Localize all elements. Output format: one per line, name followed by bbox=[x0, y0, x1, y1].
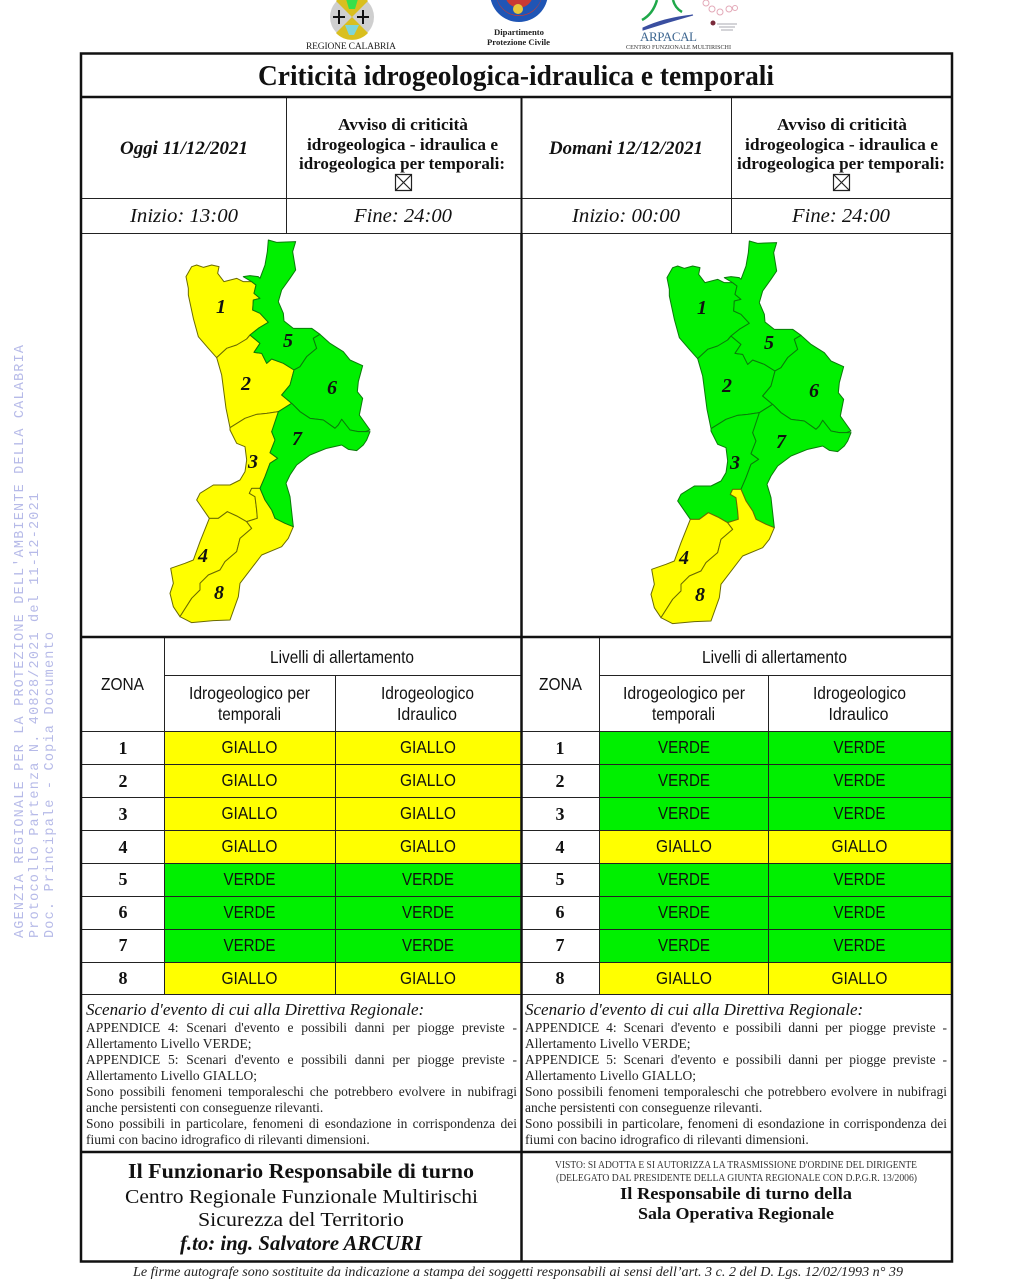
signature: duty officer bbox=[125, 1159, 478, 1255]
table: tomorrow alert levels: ZONA bbox=[539, 674, 582, 694]
table: today alert levels: VERDE bbox=[402, 935, 454, 955]
table: today alert levels: GIALLO bbox=[400, 770, 456, 790]
text block: scenario today: Allertamento Livello GIALLO; bbox=[86, 1068, 257, 1083]
table: today alert levels: VERDE bbox=[224, 902, 276, 922]
text block: scenario today: Sono possibili in particolare, fenomeni di esondazione in corrispondenza dei bbox=[86, 1116, 517, 1131]
sidebar: protocol stamp text: Protocollo Partenza N. 40828/2021 del 11-12-2021 bbox=[28, 493, 43, 938]
table: tomorrow alert levels: Livelli di allertamento bbox=[702, 647, 847, 667]
text block: scenario tomorrow: APPENDICE 5: Scenari d'evento e possibili danni per piogge previste - bbox=[525, 1052, 947, 1067]
table: tomorrow alert levels: GIALLO bbox=[656, 968, 712, 988]
sidebar: protocol stamp text bbox=[13, 344, 58, 938]
map labels: tomorrow: 1 bbox=[697, 297, 707, 319]
table: today alert levels: Idrogeologico per bbox=[189, 683, 310, 703]
table: today alert levels: 7 bbox=[118, 935, 128, 955]
map labels: today: 3 bbox=[247, 451, 258, 473]
text block: scenario tomorrow: APPENDICE 4: Scenari d'evento e possibili danni per piogge previste - bbox=[525, 1020, 947, 1035]
signature: duty officer: f.to: ing. Salvatore ARCURI bbox=[180, 1231, 423, 1255]
table: today alert levels: VERDE bbox=[224, 869, 276, 889]
text block: scenario tomorrow: fiumi con bacino idrografico di rilevanti dimensioni. bbox=[525, 1132, 809, 1147]
logo: ARPACAL: CENTRO FUNZIONALE MULTIRISCHI bbox=[626, 44, 731, 51]
map labels: tomorrow: 6 bbox=[809, 380, 819, 402]
text block: scenario tomorrow: Sono possibili in particolare, fenomeni di esondazione in corrispondenza dei bbox=[525, 1116, 947, 1131]
logo: Dipartimento Protezione Civile bbox=[487, 0, 550, 47]
table: today alert levels: GIALLO bbox=[222, 803, 278, 823]
text block: scenario today: fiumi con bacino idrografico di rilevanti dimensioni. bbox=[86, 1132, 370, 1147]
map labels: tomorrow: 2 bbox=[721, 375, 732, 397]
panel: tomorrow header: Fine: 24:00 bbox=[791, 205, 890, 227]
map labels: today: 1 bbox=[216, 296, 226, 318]
text block: scenario today: APPENDICE 5: Scenari d'evento e possibili danni per piogge previste - bbox=[86, 1052, 517, 1067]
table: today alert levels: 4 bbox=[118, 837, 128, 857]
table: tomorrow alert levels: 6 bbox=[556, 902, 564, 922]
title: Criticità idrogeologica-idraulica e temporali bbox=[258, 61, 774, 92]
table: tomorrow alert levels: 5 bbox=[556, 869, 564, 889]
map labels: today: 6 bbox=[327, 377, 337, 399]
table: tomorrow alert levels bbox=[539, 647, 951, 994]
table: tomorrow alert levels: GIALLO bbox=[656, 836, 712, 856]
map labels: today: 7 bbox=[292, 428, 303, 450]
map labels: tomorrow bbox=[678, 297, 819, 606]
logo: Regione Calabria bbox=[306, 0, 396, 52]
table: tomorrow alert levels: 4 bbox=[556, 837, 564, 857]
text block: scenario tomorrow: Sono possibili fenomeni temporaleschi che potrebbero evolvere in nubifragi bbox=[525, 1084, 947, 1099]
table: tomorrow alert levels: GIALLO bbox=[832, 836, 888, 856]
table: today alert levels: GIALLO bbox=[222, 968, 278, 988]
table: today alert levels bbox=[101, 647, 521, 994]
panel: today header: Oggi 11/12/2021 bbox=[120, 139, 248, 159]
table: tomorrow alert levels: VERDE bbox=[834, 935, 886, 955]
text block: scenario today: Sono possibili fenomeni temporaleschi che potrebbero evolvere in nubifragi bbox=[86, 1084, 517, 1099]
text block: scenario tomorrow: Allertamento Livello VERDE; bbox=[525, 1036, 690, 1051]
map labels: tomorrow: 8 bbox=[695, 584, 705, 606]
text block: scenario tomorrow: Scenario d'evento di cui alla Direttiva Regionale: bbox=[525, 1000, 863, 1019]
table: today alert levels: GIALLO bbox=[400, 836, 456, 856]
panel: today header: idrogeologica - idraulica e bbox=[307, 135, 498, 154]
table: today alert levels: 3 bbox=[118, 804, 128, 824]
text block: scenario today: Scenario d'evento di cui alla Direttiva Regionale: bbox=[86, 1000, 424, 1019]
signature: regional operations room: VISTO: SI ADOTTA E SI AUTORIZZA LA TRASMISSIONE D'ORDINE DEL DIRIGENTE bbox=[555, 1160, 917, 1171]
panel: tomorrow header: idrogeologica per temporali: bbox=[737, 154, 945, 173]
map labels: tomorrow: 3 bbox=[729, 452, 740, 474]
table: today alert levels: VERDE bbox=[402, 902, 454, 922]
text block: scenario today bbox=[86, 1000, 517, 1147]
table: tomorrow alert levels: VERDE bbox=[834, 869, 886, 889]
table: tomorrow alert levels: Idrogeologico per bbox=[623, 683, 745, 703]
signature: duty officer: Centro Regionale Funzionale Multirischi bbox=[125, 1186, 478, 1208]
table: tomorrow alert levels: 3 bbox=[556, 804, 564, 824]
panel: today header: Fine: 24:00 bbox=[353, 205, 452, 227]
table: today alert levels: GIALLO bbox=[400, 803, 456, 823]
panel: today header bbox=[120, 115, 505, 227]
text block: scenario tomorrow: anche persistenti con conseguenze rilevanti. bbox=[525, 1100, 762, 1115]
signature: regional operations room: Sala Operativa Regionale bbox=[638, 1204, 834, 1223]
table: tomorrow alert levels: 8 bbox=[556, 968, 564, 988]
map: today bbox=[170, 240, 370, 623]
table: tomorrow alert levels: 7 bbox=[556, 935, 564, 955]
signature: regional operations room bbox=[555, 1160, 917, 1223]
table: tomorrow alert levels: VERDE bbox=[658, 902, 710, 922]
table: today alert levels: GIALLO bbox=[400, 737, 456, 757]
table: today alert levels: temporali bbox=[218, 704, 281, 724]
map labels: today: 8 bbox=[214, 582, 224, 604]
text block: scenario today: APPENDICE 4: Scenari d'evento e possibili danni per piogge previste - bbox=[86, 1020, 517, 1035]
table: tomorrow alert levels: Idrogeologico bbox=[813, 683, 906, 703]
footnote: Le firme autografe sono sostituite da indicazione a stampa dei soggetti responsabili ai sensi dell’art. 3 c. 2 del D. Lgs. 12/02/1993 n° 39 bbox=[132, 1265, 903, 1280]
table: tomorrow alert levels: temporali bbox=[652, 704, 715, 724]
table: tomorrow alert levels: VERDE bbox=[834, 737, 886, 757]
table: today alert levels: 2 bbox=[118, 771, 128, 791]
panel: today header: Inizio: 13:00 bbox=[129, 205, 238, 227]
logo: Regione Calabria: REGIONE CALABRIA bbox=[306, 42, 396, 52]
table: today alert levels: GIALLO bbox=[400, 968, 456, 988]
map labels: today: 5 bbox=[283, 330, 293, 352]
table: tomorrow alert levels: VERDE bbox=[658, 737, 710, 757]
table: tomorrow alert levels: GIALLO bbox=[832, 968, 888, 988]
table: tomorrow alert levels: VERDE bbox=[658, 935, 710, 955]
panel: tomorrow header bbox=[548, 115, 945, 227]
table: today alert levels: 6 bbox=[118, 902, 128, 922]
table: tomorrow alert levels: VERDE bbox=[658, 803, 710, 823]
table: tomorrow alert levels: 2 bbox=[556, 771, 564, 791]
table: today alert levels: 5 bbox=[118, 869, 128, 889]
table: tomorrow alert levels: 1 bbox=[556, 738, 564, 758]
sidebar: protocol stamp text: AGENZIA REGIONALE PER LA PROTEZIONE DELL'AMBIENTE DELLA CALABRIA bbox=[13, 344, 28, 938]
table: today alert levels: VERDE bbox=[224, 935, 276, 955]
table: today alert levels: GIALLO bbox=[222, 836, 278, 856]
panel: today header: Avviso di criticità bbox=[338, 115, 468, 134]
logo: Dipartimento Protezione Civile: Protezione Civile bbox=[487, 37, 550, 47]
table: today alert levels: 8 bbox=[118, 968, 128, 988]
table: today alert levels: ZONA bbox=[101, 674, 144, 694]
map: tomorrow bbox=[651, 241, 851, 624]
table: today alert levels: GIALLO bbox=[222, 737, 278, 757]
panel: tomorrow header: Domani 12/12/2021 bbox=[548, 139, 703, 159]
logo: ARPACAL: ARPACAL bbox=[640, 29, 697, 44]
table: tomorrow alert levels: VERDE bbox=[658, 770, 710, 790]
text block: scenario tomorrow bbox=[525, 1000, 947, 1147]
map labels: tomorrow: 7 bbox=[776, 431, 787, 453]
map labels: today: 2 bbox=[240, 373, 251, 395]
logo: ARPACAL bbox=[626, 0, 738, 51]
panel: today header: idrogeologica per temporali: bbox=[299, 154, 505, 173]
sidebar: protocol stamp text: Doc. Principale - Copia Documento bbox=[43, 632, 58, 938]
table: tomorrow alert levels: VERDE bbox=[658, 869, 710, 889]
map labels: today: 4 bbox=[197, 545, 208, 567]
text block: scenario tomorrow: Allertamento Livello GIALLO; bbox=[525, 1068, 696, 1083]
table: tomorrow alert levels: VERDE bbox=[834, 770, 886, 790]
table: tomorrow alert levels: Idraulico bbox=[828, 704, 888, 724]
signature: regional operations room: (DELEGATO DAL PRESIDENTE DELLA GIUNTA REGIONALE CON D.P.G.R. 13/2006) bbox=[556, 1173, 917, 1184]
table: tomorrow alert levels: VERDE bbox=[834, 803, 886, 823]
signature: duty officer: Sicurezza del Territorio bbox=[198, 1209, 404, 1231]
logo: Dipartimento Protezione Civile: Dipartimento bbox=[494, 27, 544, 37]
panel: tomorrow header: idrogeologica - idraulica e bbox=[745, 135, 938, 154]
table: today alert levels: Livelli di allertamento bbox=[270, 647, 414, 667]
signature: regional operations room: Il Responsabile di turno della bbox=[620, 1184, 853, 1203]
table: today alert levels: GIALLO bbox=[222, 770, 278, 790]
panel: tomorrow header: Inizio: 00:00 bbox=[571, 205, 680, 227]
text block: scenario today: anche persistenti con conseguenze rilevanti. bbox=[86, 1100, 323, 1115]
table: today alert levels: 1 bbox=[118, 738, 128, 758]
table: today alert levels: Idrogeologico bbox=[381, 683, 474, 703]
signature: duty officer: Il Funzionario Responsabile di turno bbox=[128, 1159, 474, 1183]
table: tomorrow alert levels: VERDE bbox=[834, 902, 886, 922]
panel: tomorrow header: Avviso di criticità bbox=[777, 115, 907, 134]
table: today alert levels: Idraulico bbox=[397, 704, 457, 724]
map labels: tomorrow: 4 bbox=[678, 547, 689, 569]
text block: scenario today: Allertamento Livello VERDE; bbox=[86, 1036, 251, 1051]
map labels: tomorrow: 5 bbox=[764, 332, 774, 354]
map labels: today bbox=[197, 296, 337, 604]
table: today alert levels: VERDE bbox=[402, 869, 454, 889]
